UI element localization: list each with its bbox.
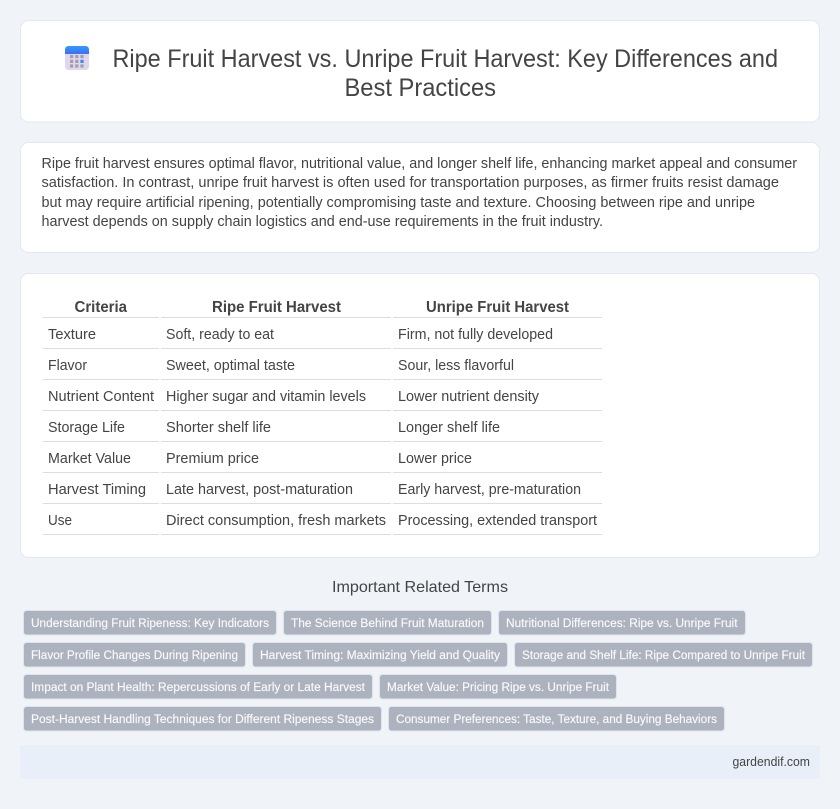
row: storage life: Longer shelf life [398,420,500,436]
row: flavor: Sweet, optimal taste [166,358,295,374]
title: Ripe Fruit Harvest vs. Unripe Fruit Harvest: Key Differences and [112,45,778,73]
tag [24,610,276,635]
title [112,45,778,102]
tag: Market Value: Pricing Ripe vs. Unripe Fruit [387,680,610,694]
text block: description paragraph: harvest depends on supply chain logistics and end-use requirements in the fruit industry. [42,214,603,230]
tag: The Science Behind Fruit Maturation [291,616,484,630]
tag [24,706,382,731]
tags: related terms [24,610,812,731]
tag [388,706,724,731]
table header: Unripe Fruit Harvest [426,299,570,316]
row: flavor: Flavor [48,358,87,374]
table header [43,299,602,318]
footer: gardendif.com [732,754,810,769]
text block: description paragraph: satisfaction. In contrast, unripe fruit harvest is often used for transportation purposes, as firmer fruits resist damage [42,175,779,191]
row: market value: Market Value [48,451,131,467]
row: use [43,513,602,535]
row: nutrient content: Higher sugar and vitamin levels [166,389,366,405]
tag: Flavor Profile Changes During Ripening [31,648,238,662]
row: flavor: Sour, less flavorful [398,358,514,374]
table header: Criteria [74,299,127,316]
text block: description paragraph [42,156,797,230]
row: harvest timing: Late harvest, post-maturation [166,482,353,498]
row: nutrient content: Lower nutrient density [398,389,540,405]
row: storage life: Storage Life [48,420,125,436]
tag: Post-Harvest Handling Techniques for Different Ripeness Stages [31,712,374,726]
row: flavor [43,358,602,380]
footer [20,745,820,779]
row: nutrient content [43,389,602,411]
row: nutrient content: Nutrient Content [48,389,154,405]
row: texture: Texture [48,327,96,343]
tag [498,610,746,635]
icon: calendar [65,46,89,70]
row: texture: Firm, not fully developed [398,327,553,343]
row: texture [43,327,602,349]
text block: description paragraph: but may require artificial ripening, potentially compromising taste and texture. Choosing between ripe and unripe [42,195,755,211]
panel: description [20,142,820,252]
table header: Ripe Fruit Harvest [212,299,342,316]
tag: Consumer Preferences: Taste, Texture, and Buying Behaviors [396,712,717,726]
tag [284,610,492,635]
row: market value: Lower price [398,451,472,467]
tag [24,642,246,667]
tag: Understanding Fruit Ripeness: Key Indicators [31,616,269,630]
row: harvest timing [43,482,602,504]
panel: header [20,20,820,122]
row: use: Processing, extended transport [398,513,597,529]
tag [252,642,508,667]
row: harvest timing: Early harvest, pre-maturation [398,482,581,498]
row: storage life: Shorter shelf life [166,420,271,436]
row: texture: Soft, ready to eat [166,327,274,343]
row: storage life [43,420,602,442]
tag [514,642,812,667]
row: use: Direct consumption, fresh markets [166,513,386,529]
tag: Impact on Plant Health: Repercussions of Early or Late Harvest [31,680,366,694]
tag [380,674,616,699]
tag [24,674,372,699]
row: harvest timing: Harvest Timing [48,482,146,498]
row: market value: Premium price [166,451,259,467]
text block: description paragraph: Ripe fruit harvest ensures optimal flavor, nutritional value, and longer shelf life, enhancing market appeal and consumer [42,156,797,172]
row: market value [43,451,602,473]
row: use: Use [48,513,72,529]
heading: related terms: Important Related Terms [332,579,508,596]
tag: Storage and Shelf Life: Ripe Compared to Unripe Fruit [522,648,806,662]
tag: Harvest Timing: Maximizing Yield and Quality [260,648,501,662]
title: Best Practices [344,74,496,102]
panel: comparison table [20,274,820,558]
tag: Nutritional Differences: Ripe vs. Unripe Fruit [506,616,738,630]
